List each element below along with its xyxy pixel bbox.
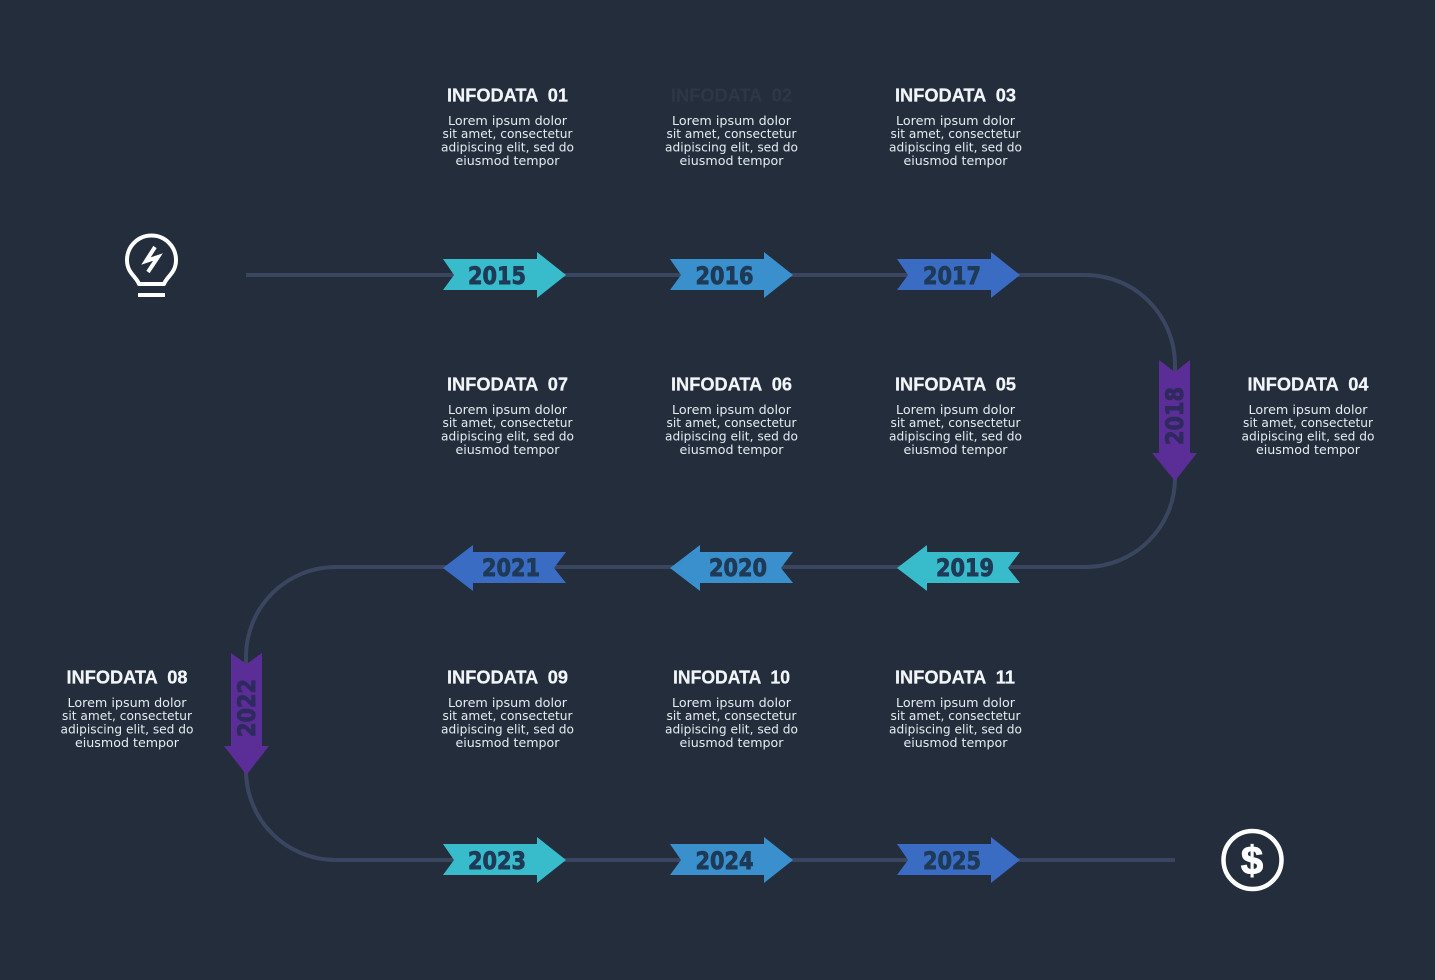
arrow: 2024: 2024 — [696, 847, 754, 875]
arrow: 2018: 2018 — [1161, 387, 1189, 445]
text block: INFODATA 01: eiusmod tempor — [456, 153, 560, 168]
text block: INFODATA 01 — [441, 86, 574, 168]
arrow: 2019: 2019 — [936, 554, 994, 582]
text block: INFODATA 03: INFODATA 03 — [895, 86, 1016, 106]
text block: INFODATA 03: sit amet, consectetur — [890, 126, 1021, 141]
text block: INFODATA 05: Lorem ipsum dolor — [896, 402, 1016, 417]
arrow: 2020 — [670, 545, 793, 591]
text block: INFODATA 02: Lorem ipsum dolor — [672, 113, 792, 128]
text block: INFODATA 10: eiusmod tempor — [680, 735, 784, 750]
text block: INFODATA 08: eiusmod tempor — [75, 735, 180, 750]
text block: INFODATA 08: INFODATA 08 — [66, 668, 188, 688]
text block: INFODATA 02 — [665, 86, 798, 168]
text block: INFODATA 03: adipiscing elit, sed do — [889, 140, 1022, 154]
text block: INFODATA 09: Lorem ipsum dolor — [448, 695, 568, 710]
text block: INFODATA 07: INFODATA 07 — [447, 374, 568, 394]
arrow: 2017: 2017 — [923, 262, 981, 290]
arrow: 2024 — [670, 837, 793, 883]
arrow: 2020: 2020 — [709, 554, 767, 582]
arrow: 2019 — [897, 545, 1020, 591]
text block: INFODATA 08: adipiscing elit, sed do — [60, 722, 194, 736]
text block: INFODATA 02: INFODATA 02 — [671, 86, 792, 106]
text block: INFODATA 11: eiusmod tempor — [904, 735, 1008, 750]
text block: INFODATA 01: Lorem ipsum dolor — [448, 113, 568, 128]
text block: INFODATA 05 — [889, 374, 1022, 457]
text block: INFODATA 06: eiusmod tempor — [680, 442, 784, 457]
text block: INFODATA 06: adipiscing elit, sed do — [665, 428, 798, 444]
text block: INFODATA 11: sit amet, consectetur — [890, 708, 1021, 723]
text block: INFODATA 03: eiusmod tempor — [904, 153, 1008, 168]
text block: INFODATA 04: eiusmod tempor — [1256, 442, 1361, 457]
icon: light bulb — [127, 236, 176, 297]
text block: INFODATA 10: sit amet, consectetur — [666, 708, 797, 723]
text block: INFODATA 07: Lorem ipsum dolor — [448, 402, 568, 417]
text block: INFODATA 05: INFODATA 05 — [895, 374, 1016, 394]
arrow: 2023: 2023 — [468, 847, 526, 875]
arrow: 2023 — [443, 837, 566, 883]
arrow: 2025 — [897, 837, 1020, 883]
icon: dollar coin — [1224, 831, 1282, 889]
text block: INFODATA 02: eiusmod tempor — [680, 153, 784, 168]
text block: INFODATA 10: INFODATA 10 — [673, 668, 790, 688]
text block: INFODATA 05: eiusmod tempor — [904, 442, 1008, 457]
text block: INFODATA 03 — [889, 86, 1022, 168]
text block: INFODATA 09: eiusmod tempor — [456, 735, 560, 750]
text block: INFODATA 11: Lorem ipsum dolor — [896, 695, 1016, 710]
text block: INFODATA 10: adipiscing elit, sed do — [665, 722, 798, 736]
text block: INFODATA 01: sit amet, consectetur — [442, 126, 573, 141]
arrow: 2017 — [897, 252, 1020, 298]
arrow: 2021 — [443, 545, 566, 591]
text block: INFODATA 02: adipiscing elit, sed do — [665, 140, 798, 154]
text block: INFODATA 09 — [441, 668, 574, 750]
text block: INFODATA 04: Lorem ipsum dolor — [1248, 402, 1368, 417]
text block: INFODATA 01: adipiscing elit, sed do — [441, 140, 574, 154]
text block: INFODATA 04: sit amet, consectetur — [1243, 415, 1374, 430]
text block: INFODATA 07 — [441, 374, 574, 457]
text block: INFODATA 09: adipiscing elit, sed do — [441, 722, 574, 736]
text block: INFODATA 08: sit amet, consectetur — [62, 708, 193, 723]
arrow: 2015: 2015 — [468, 262, 526, 290]
text block: INFODATA 01: INFODATA 01 — [447, 86, 568, 106]
arrow: 2022: 2022 — [233, 679, 261, 737]
text block: INFODATA 10: Lorem ipsum dolor — [672, 695, 792, 710]
text block: INFODATA 07: eiusmod tempor — [456, 442, 560, 457]
arrow: 2021: 2021 — [482, 554, 540, 582]
text block: INFODATA 06: Lorem ipsum dolor — [672, 402, 792, 417]
text block: INFODATA 06: INFODATA 06 — [671, 374, 792, 394]
text block: INFODATA 10 — [665, 668, 798, 750]
arrow: 2015 — [443, 252, 566, 298]
text block: INFODATA 04: adipiscing elit, sed do — [1242, 428, 1374, 444]
text block: INFODATA 04: INFODATA 04 — [1248, 374, 1368, 394]
text block: INFODATA 02: sit amet, consectetur — [666, 126, 797, 141]
text block: INFODATA 11 — [889, 668, 1022, 750]
text block: INFODATA 08 — [60, 668, 194, 750]
text block: INFODATA 09: sit amet, consectetur — [442, 708, 573, 723]
text block: INFODATA 06: sit amet, consectetur — [666, 415, 797, 430]
timeline path — [246, 275, 1175, 860]
text block: INFODATA 08: Lorem ipsum dolor — [68, 695, 187, 710]
text block: INFODATA 06 — [665, 374, 798, 457]
text block: INFODATA 11: INFODATA 11 — [895, 668, 1015, 688]
text block: INFODATA 03: Lorem ipsum dolor — [896, 113, 1016, 128]
text block: INFODATA 07: adipiscing elit, sed do — [441, 428, 574, 444]
text block: INFODATA 04 — [1242, 374, 1374, 457]
arrow: 2016: 2016 — [696, 262, 754, 290]
text block: INFODATA 11: adipiscing elit, sed do — [889, 722, 1022, 736]
arrow: 2025: 2025 — [923, 847, 981, 875]
text block: INFODATA 09: INFODATA 09 — [447, 668, 568, 688]
text block: INFODATA 05: sit amet, consectetur — [890, 415, 1021, 430]
arrow: 2022 — [224, 653, 269, 775]
text block: INFODATA 07: sit amet, consectetur — [442, 415, 573, 430]
text block: INFODATA 05: adipiscing elit, sed do — [889, 428, 1022, 444]
arrow: 2018 — [1152, 360, 1197, 481]
arrow: 2016 — [670, 252, 793, 298]
icon: dollar coin: $ — [1241, 839, 1263, 883]
